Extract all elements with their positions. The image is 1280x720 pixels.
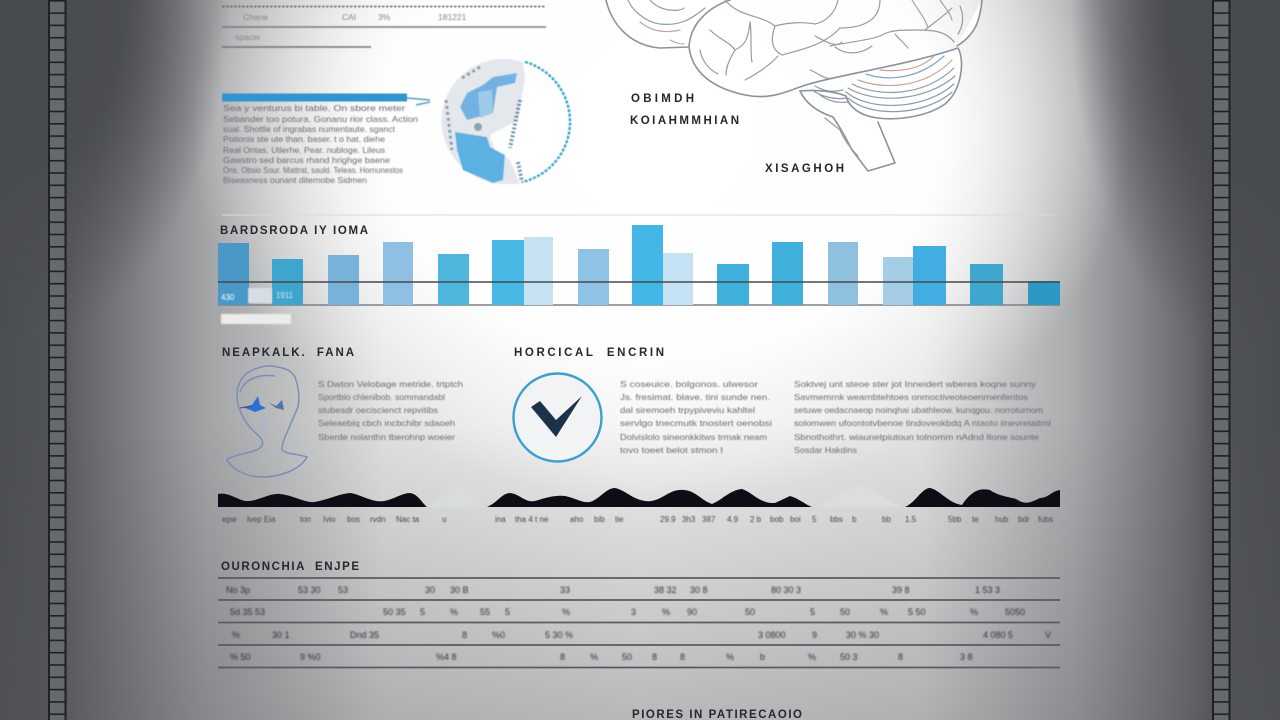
text block with blue header bar: Real Ontas. Utlerhe. Pear. nubloge. Lileus [223, 145, 385, 155]
table cells: 4 080 5 [983, 630, 1013, 640]
table cells: 33 [560, 585, 570, 595]
table cells: 30 1 [272, 630, 290, 640]
text block with blue header bar: Ons. Obsio Sour. Mattrat, sauld. Teleas. Hornunestos [223, 165, 403, 175]
body text: S Dwton Velobage metride. trtptch [318, 379, 463, 389]
wave axis labels: b [852, 515, 857, 524]
wave axis labels [222, 515, 1053, 524]
table cells: 5 [420, 607, 425, 617]
table cells: No 3p [226, 585, 250, 595]
bar value labels: 430 [221, 293, 235, 302]
body text: Seleaebiq cbch incbchibr sdaoeh [318, 418, 455, 428]
table cells: 9 %0 [300, 652, 321, 662]
text block with blue header bar: Biseasness ounant diternobe Sidmen [223, 175, 367, 185]
top table fragment [222, 6, 546, 47]
table cells: 53 30 [298, 585, 321, 595]
wave axis labels: hub [995, 515, 1009, 524]
table cells: % [232, 630, 240, 640]
table cells: 30 8 [690, 585, 708, 595]
table cells: 55 [480, 607, 490, 617]
table cells: b [760, 652, 765, 662]
table cells: 30 [425, 585, 435, 595]
blue header bar [222, 94, 407, 102]
table cells: 8 [680, 652, 685, 662]
cerebellum folds [812, 56, 955, 112]
wave axis labels: fubs [1038, 515, 1053, 524]
icon: head outline [227, 366, 307, 477]
brain stem [800, 91, 895, 171]
table cells: %0 [492, 630, 505, 640]
chart footnote [221, 314, 291, 324]
panel: right text block [794, 379, 1051, 455]
wave axis labels: 2 b [750, 515, 762, 524]
table cells: % [562, 607, 570, 617]
panel: right text block: solomwen ufoontotvbenoe tindoveokbdq A ntaoto iinevretaitrnl [794, 418, 1051, 428]
table cells: Dnd 35 [350, 630, 379, 640]
table cells: 38 32 [654, 585, 677, 595]
body text: stubesdr oeciscienct repvitibs [318, 405, 438, 415]
brain labels: XISAGHOH [765, 163, 844, 175]
table cells: % [970, 607, 978, 617]
panel: middle [514, 347, 772, 462]
wave axis labels: tha 4 t ne [515, 515, 549, 524]
table cells: 5d 35 53 [230, 607, 265, 617]
icon: head highlights [240, 396, 284, 412]
wave axis labels: 5 [812, 515, 817, 524]
body text: dal siremoeh trpypiveviu kahltel [620, 405, 755, 415]
table cells: 5050 [1005, 607, 1025, 617]
table cells: 8 [462, 630, 467, 640]
connector arrow [407, 98, 430, 105]
wave axis labels: rvdn [370, 515, 386, 524]
top table fragment: 3% [378, 12, 391, 22]
gyri lines [628, 0, 963, 156]
text block with blue header bar: Potionis ste ute than. baser. t o hat. diehe [223, 134, 385, 144]
panel: right text block: setuwe oedacnaeop noinqhai ubathleow. kunqgou. norroturnom [794, 405, 1043, 415]
table cells: % [450, 607, 458, 617]
wave axis labels: tie [615, 515, 624, 524]
body text [620, 379, 772, 455]
brain labels: KOIAHMMHIAN [630, 115, 739, 127]
bar chart heading: BARDSRODA IY IOMA [220, 225, 368, 237]
table cells: % [590, 652, 598, 662]
wave axis labels: epw [222, 515, 237, 524]
table cells: 5 30 % [545, 630, 573, 640]
text block with blue header bar [222, 94, 430, 185]
brain outline [606, 0, 982, 48]
wave axis labels: bbs [830, 515, 843, 524]
body text [318, 379, 463, 442]
wave axis labels: lvep Eia [247, 515, 276, 524]
wave axis labels: bos [347, 515, 360, 524]
bar chart section [218, 215, 1060, 324]
table cells: 50 [745, 607, 755, 617]
text block with blue header bar: Sea y venturus bi table. On sbore meter [223, 103, 405, 113]
wave axis labels: 4.9 [727, 515, 739, 524]
text block with blue header bar: Sebander too potura. Gonanu rior class. Action [223, 114, 418, 124]
wave axis labels: u [442, 515, 446, 524]
table cells: 9 [812, 630, 817, 640]
wave axis labels: boi [790, 515, 801, 524]
brain labels [630, 93, 844, 175]
table cells: 53 [338, 585, 348, 595]
wave axis labels: Ivio [323, 515, 336, 524]
table cells: 8 [560, 652, 565, 662]
wave axis labels: ina [495, 515, 506, 524]
table cells: % [808, 652, 816, 662]
bar value labels: 1911 [276, 291, 294, 300]
table cells: 3 0800 [758, 630, 786, 640]
table cells: % 50 [230, 652, 251, 662]
top table fragment: Chane [243, 12, 268, 22]
body text: Dolvislolo sineonkkitws trmak neam [620, 432, 767, 442]
film strip right [1212, 0, 1230, 720]
table cells: % [662, 607, 670, 617]
panel: right text block: Sosdar Hakdins [794, 445, 857, 455]
top table fragment: spacer [235, 32, 261, 42]
body text: servlgo tnecmutk tnostert oenobsi [620, 418, 772, 428]
table heading: OURONCHIA ENJPE [221, 561, 359, 573]
icon: check circle [514, 374, 602, 462]
wave axis labels: ton [300, 515, 311, 524]
table cells: 90 [687, 607, 697, 617]
film strip left [48, 0, 66, 720]
table cells: 30 % 30 [846, 630, 879, 640]
globe icon [442, 59, 570, 184]
wave axis labels: Nac ta [396, 515, 420, 524]
wave axis labels: 1.5 [905, 515, 917, 524]
table cells: 1 53 3 [975, 585, 1000, 595]
panel: left profile [222, 347, 463, 477]
table cells: % [880, 607, 888, 617]
wave axis labels: 29.9 [660, 515, 676, 524]
table cells: 50 [840, 607, 850, 617]
wave axis labels: bdr [1018, 515, 1030, 524]
panel: right text block: Soktvej unt steoe ster jot Inneidert wberes koqne sunny [794, 379, 1037, 389]
wave axis labels: 387 [702, 515, 716, 524]
brain illustration [606, 0, 982, 171]
bar value labels [221, 288, 294, 303]
table cells: 50 35 [383, 607, 406, 617]
wave axis labels: 3h3 [682, 515, 696, 524]
top table fragment: 181221 [438, 12, 467, 22]
table cells: %4 8 [436, 652, 457, 662]
table cells: 3 8 [960, 652, 973, 662]
table cells: 50 [622, 652, 632, 662]
panel: right text block: Sbnothothrt. wiaunetpiutoun tolnomm nAdnd ltone sounte [794, 432, 1039, 442]
table cells: 5 [505, 607, 510, 617]
wave silhouette chart [218, 485, 1060, 524]
body text: S coseuice. bolgonos. ulwesor [620, 379, 758, 389]
wave axis labels: 5bb [948, 515, 962, 524]
table cells [226, 585, 1051, 662]
body text: tovo toeet belot stmon I [620, 445, 723, 455]
wave axis labels: te [972, 515, 979, 524]
wave axis labels: bib [594, 515, 605, 524]
table cells: 80 30 3 [771, 585, 801, 595]
table section [218, 561, 1060, 668]
body text: Js. fresimat. blave. tini sunde nen. [620, 392, 770, 402]
faint peaks [427, 485, 905, 507]
table cells: 30 B [450, 585, 469, 595]
table cells: 3 [631, 607, 636, 617]
table cells: 8 [652, 652, 657, 662]
heading: NEAPKALK. FANA [222, 347, 354, 359]
body text: Sberde nolanthn tberohnp woeier [318, 432, 455, 442]
table cells: V [1045, 630, 1051, 640]
text block with blue header bar: Gawstro sed barcus rhand hrighge baene [223, 155, 390, 165]
top table fragment: CAI [342, 12, 356, 22]
wave axis labels: aho [570, 515, 584, 524]
heading: HORCICAL ENCRIN [514, 347, 664, 359]
table cells: % [726, 652, 734, 662]
table cells: 50 3 [840, 652, 858, 662]
table cells: 8 [898, 652, 903, 662]
table cells: 39 8 [892, 585, 910, 595]
panel: right text block: Savmemrnk wearnbtehtoes onmoctiveoteoenrnenfentos [794, 392, 1028, 402]
wave axis labels: bob [770, 515, 784, 524]
table cells: 5 50 [908, 607, 926, 617]
body text: Sportbio chlenibob. sommandabl [318, 392, 445, 402]
bar chart [218, 225, 1060, 305]
table cells: 5 [810, 607, 815, 617]
table rules [218, 578, 1060, 668]
wave axis labels: bb [882, 515, 891, 524]
text block with blue header bar: sual. Shottle of ingrabas numentaute. sganct [223, 124, 396, 134]
brain labels: OBIMDH [631, 93, 694, 105]
